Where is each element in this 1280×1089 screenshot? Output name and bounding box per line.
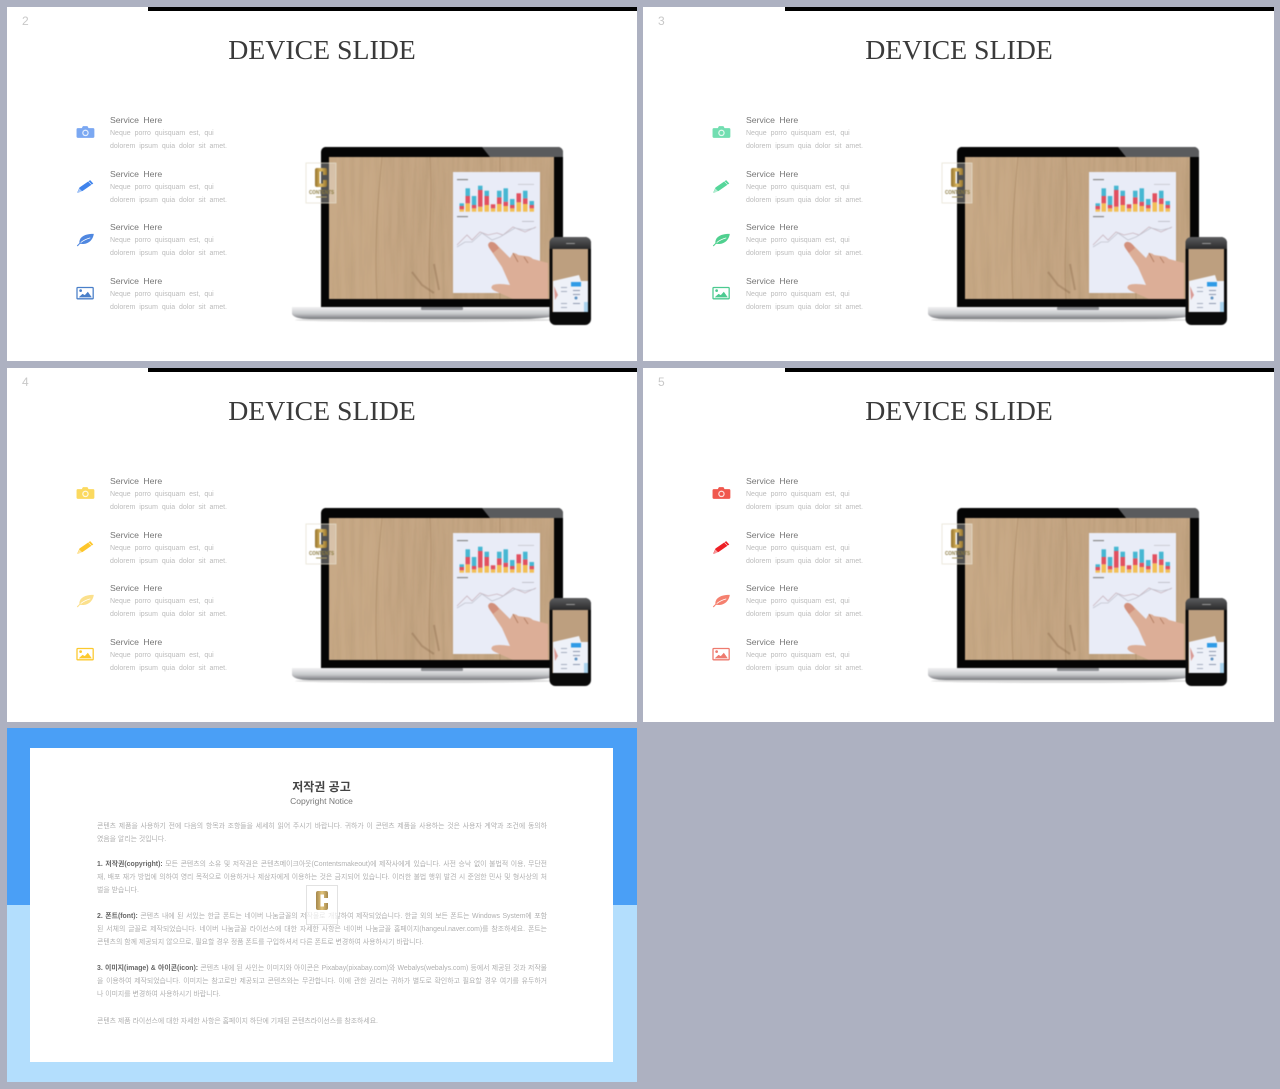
- service item 4: dolorem ipsum quia dolor sit amet.: [746, 304, 863, 311]
- service item 4: [76, 276, 227, 311]
- service item 2: Neque porro quisquam est, qui: [110, 184, 214, 191]
- service item 3: dolorem ipsum quia dolor sit amet.: [746, 611, 863, 618]
- service item 3: dolorem ipsum quia dolor sit amet.: [110, 611, 227, 618]
- top black bar: [148, 7, 638, 11]
- service item 2: Service Here: [746, 169, 798, 179]
- service item 4: dolorem ipsum quia dolor sit amet.: [746, 665, 863, 672]
- watermark logo: [306, 885, 338, 925]
- service item 2: dolorem ipsum quia dolor sit amet.: [110, 558, 227, 565]
- section 3: image and icon: 나 이미지를 변경하여 사용하시기 바랍니다.: [97, 991, 221, 998]
- service item 1: dolorem ipsum quia dolor sit amet.: [110, 143, 227, 150]
- service item 3: Service Here: [746, 583, 798, 593]
- service item 4: dolorem ipsum quia dolor sit amet.: [110, 665, 227, 672]
- service item 2: [77, 169, 227, 204]
- service item 1: [76, 115, 227, 150]
- service item 4: dolorem ipsum quia dolor sit amet.: [110, 304, 227, 311]
- service item 1: Service Here: [110, 115, 162, 125]
- service item 4: [76, 637, 227, 672]
- page number: 2: [22, 14, 29, 28]
- service item 3: Neque porro quisquam est, qui: [746, 237, 850, 244]
- service item 1: Neque porro quisquam est, qui: [746, 491, 850, 498]
- section 3: image and icon: 3. 이미지(image) & 아이콘(icon): 콘텐츠 내에 된 사인는 이미지와 아이콘은 Pixabay(pixabay.com)와 Webalys(webalys.com) 등에서 제공된 것과 저작물: [97, 965, 547, 972]
- service item 2: Service Here: [110, 530, 162, 540]
- panel: copyright notice: [7, 728, 637, 1082]
- heading: DEVICE SLIDE: [865, 396, 1053, 427]
- section 1: copyright: 1. 저작권(copyright): 모든 콘텐츠의 소유 및 저작권은 콘텐츠메이크아웃(Contentsmakeout)에 제작사에게 있습니다. 사전 승낙 없이 불법적 이용, 무단전: [97, 861, 547, 868]
- service item 2: Neque porro quisquam est, qui: [110, 545, 214, 552]
- notice card: [30, 748, 613, 1062]
- section 1: copyright: [97, 860, 547, 894]
- service item 1: Neque porro quisquam est, qui: [746, 130, 850, 137]
- service item 4: Neque porro quisquam est, qui: [110, 652, 214, 659]
- notice subtitle: Copyright Notice: [290, 796, 353, 806]
- service item 1: Neque porro quisquam est, qui: [110, 491, 214, 498]
- service item 4: Service Here: [746, 637, 798, 647]
- intro paragraph: 였음을 알리는 것입니다.: [97, 836, 166, 843]
- service item 2: Service Here: [110, 169, 162, 179]
- service item 4: Service Here: [746, 276, 798, 286]
- service item 4: [712, 276, 863, 311]
- service item 1: Service Here: [746, 115, 798, 125]
- heading: DEVICE SLIDE: [865, 35, 1053, 66]
- device mockup: laptop and phone: [292, 146, 592, 326]
- service item 1: [712, 115, 863, 150]
- service item 3: Neque porro quisquam est, qui: [746, 598, 850, 605]
- service item 2: Service Here: [746, 530, 798, 540]
- section 2: font: 2. 폰트(font): 콘텐츠 내에 된 서있는 한글 폰트는 네이버 나눔글꼴의 저작물로 개발하여 제작되었습니다. 한글 외의 보든 폰트는 Windows System에 포함: [97, 913, 547, 920]
- service item 4: Neque porro quisquam est, qui: [110, 291, 214, 298]
- service item 2: [77, 530, 227, 565]
- service item 3: Service Here: [746, 222, 798, 232]
- service item 3: Service Here: [110, 222, 162, 232]
- service item 4: Neque porro quisquam est, qui: [746, 652, 850, 659]
- top black bar: [148, 368, 638, 372]
- service item 3: dolorem ipsum quia dolor sit amet.: [110, 250, 227, 257]
- section 1: copyright: 재, 배포 재가 방법에 의하여 영리 목적으로 이용하거나 제삼자에게 이용하는 것은 금지되어 있습니다. 이러한 불법 행위 발견 시 준엄한 민사 및 형사상의 처: [97, 874, 547, 881]
- service item 2: [713, 530, 863, 565]
- page number: 3: [658, 14, 665, 28]
- service item 1: dolorem ipsum quia dolor sit amet.: [746, 143, 863, 150]
- service item 1: dolorem ipsum quia dolor sit amet.: [746, 504, 863, 511]
- service item 3: [712, 222, 863, 257]
- service item 2: dolorem ipsum quia dolor sit amet.: [110, 197, 227, 204]
- service item 3: [712, 583, 863, 618]
- page number: 4: [22, 375, 29, 389]
- panel: slide 2 (blue): [7, 7, 637, 361]
- service item 2: dolorem ipsum quia dolor sit amet.: [746, 558, 863, 565]
- top black bar: [785, 368, 1275, 372]
- heading: DEVICE SLIDE: [228, 35, 416, 66]
- service item 3: Neque porro quisquam est, qui: [110, 237, 214, 244]
- service item 1: Service Here: [746, 476, 798, 486]
- service item 1: [76, 476, 227, 511]
- lower light-blue band: [7, 905, 637, 1082]
- section 2: font: [97, 912, 547, 946]
- service item 3: Neque porro quisquam est, qui: [110, 598, 214, 605]
- panel: slide 5 (red): [643, 368, 1274, 722]
- heading: DEVICE SLIDE: [228, 396, 416, 427]
- service item 1: [712, 476, 863, 511]
- service item 4: [712, 637, 863, 672]
- service item 1: dolorem ipsum quia dolor sit amet.: [110, 504, 227, 511]
- section 1: copyright: 벌을 받습니다.: [97, 887, 139, 894]
- intro paragraph: [97, 822, 547, 843]
- section 2: font: 된 서체의 글꼴로 제작되었습니다. 네이버 나눔글꼴 라이선스에 대한 자세한 사항은 네이버 나눔글꼴 홈페이지(hangeul.naver.com)를 참조하세요. 폰트는: [97, 926, 547, 933]
- service item 2: Neque porro quisquam est, qui: [746, 184, 850, 191]
- service item 3: Service Here: [110, 583, 162, 593]
- service item 2: [713, 169, 863, 204]
- service item 2: Neque porro quisquam est, qui: [746, 545, 850, 552]
- service item 3: [76, 222, 227, 257]
- section 3: image and icon: 을 이용하여 제작되었습니다. 이미지는 참고로만 제공되고 콘텐츠와는 무관합니다. 이에 관한 권리는 귀하가 별도로 확인하고 필요할 경우 여기를 유두하거: [97, 978, 547, 985]
- service item 4: Service Here: [110, 637, 162, 647]
- device mockup: laptop and phone: [292, 507, 592, 687]
- service item 1: Neque porro quisquam est, qui: [110, 130, 214, 137]
- service item 3: [76, 583, 227, 618]
- service item 2: dolorem ipsum quia dolor sit amet.: [746, 197, 863, 204]
- panel: slide 3 (green): [643, 7, 1274, 361]
- closing line: 콘텐츠 제품 라이선스에 대한 자세한 사항은 홈페이지 하단에 기재된 콘텐츠라이선스를 참조하세요.: [97, 1018, 378, 1025]
- device mockup: laptop and phone: [928, 507, 1228, 687]
- notice title: 저작권 공고: [292, 780, 351, 794]
- service item 3: dolorem ipsum quia dolor sit amet.: [746, 250, 863, 257]
- page number: 5: [658, 375, 665, 389]
- device mockup: laptop and phone: [928, 146, 1228, 326]
- panel: slide 4 (yellow): [7, 368, 637, 722]
- service item 1: Service Here: [110, 476, 162, 486]
- top black bar: [785, 7, 1275, 11]
- service item 4: Service Here: [110, 276, 162, 286]
- intro paragraph: 콘텐츠 제품을 사용하기 전에 다음의 항목과 조항들을 세세히 읽어 주시기 바랍니다. 귀하가 이 콘텐츠 제품을 사용하는 것은 사용자 계약과 조건에 동의하: [97, 823, 547, 830]
- section 3: image and icon: [97, 964, 547, 998]
- section 2: font: 콘텐츠의 함께 제공되지 않으므로, 필요할 경우 정품 폰트를 구입하셔서 다른 폰트로 변경하여 사용하시기 바랍니다.: [97, 939, 424, 946]
- service item 4: Neque porro quisquam est, qui: [746, 291, 850, 298]
